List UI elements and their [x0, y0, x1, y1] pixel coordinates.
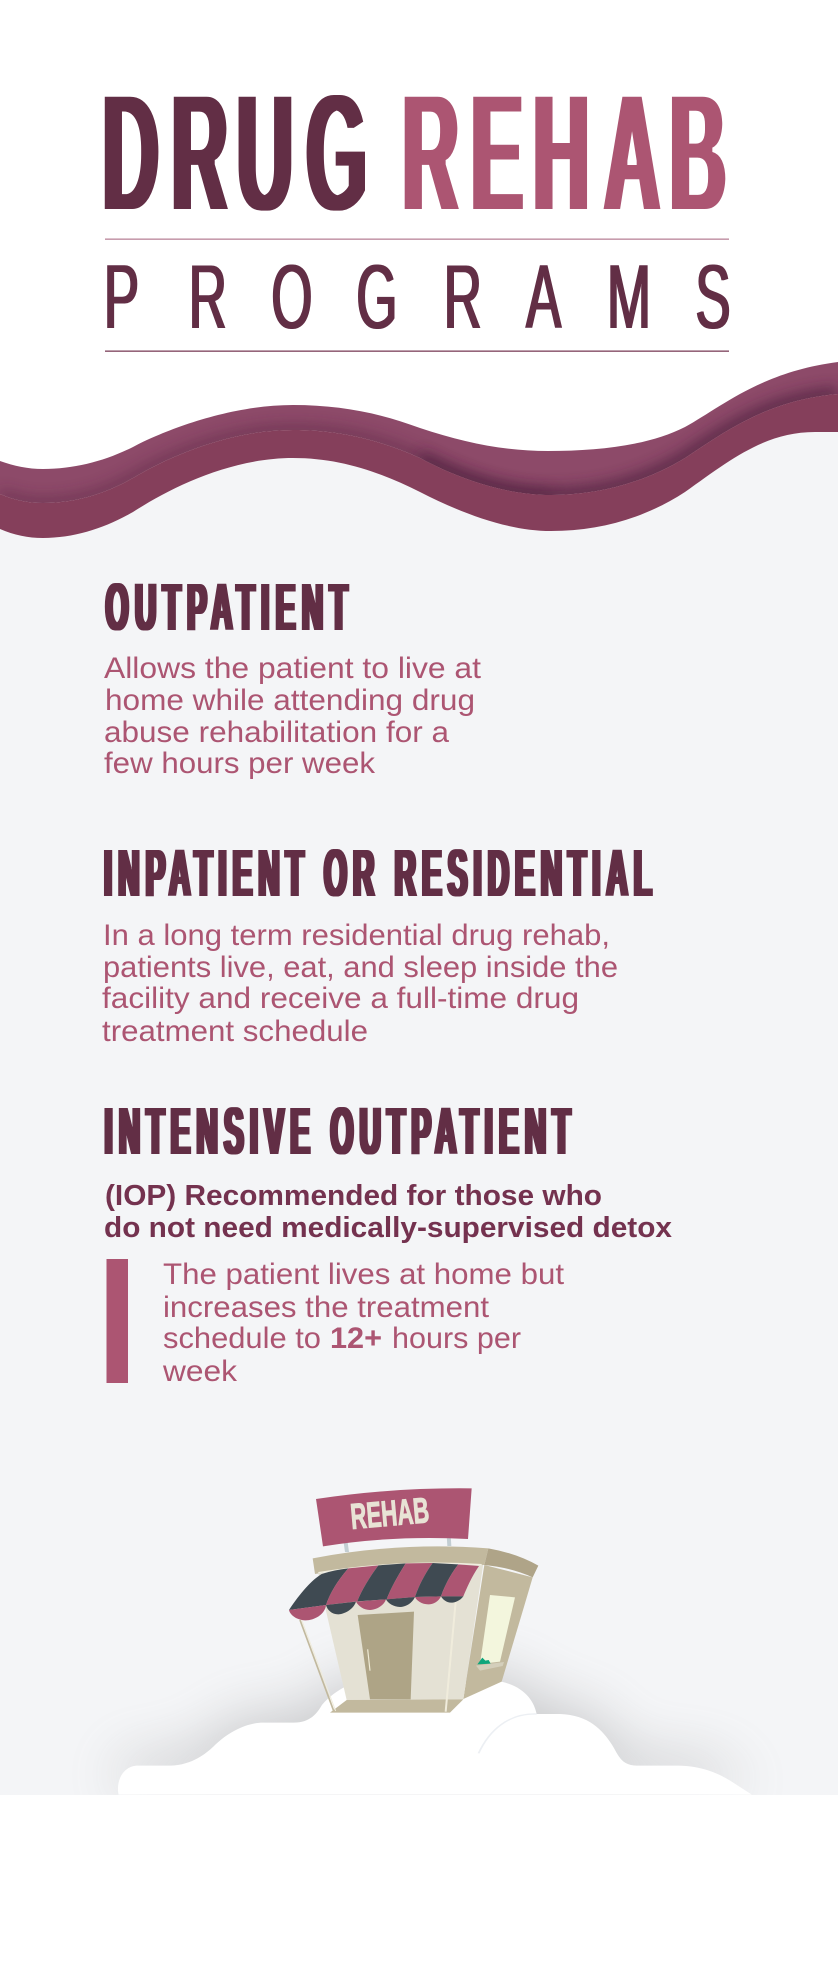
- sign posts: [343, 1535, 451, 1552]
- description: intensive outpatient: week: [162, 1355, 238, 1388]
- window box: [476, 1662, 504, 1671]
- bold intro: IOP: [104, 1180, 672, 1244]
- description: intensive outpatient: schedule to: [163, 1322, 321, 1355]
- plant: [477, 1658, 491, 1664]
- wave band: [0, 362, 838, 538]
- icon: rehab storefront: [289, 1488, 538, 1713]
- awning poles: [300, 1602, 456, 1712]
- description: inpatient: patients live, eat, and sleep inside the: [103, 951, 618, 984]
- awning: [289, 1563, 479, 1620]
- description: intensive outpatient: increases the treatment: [163, 1291, 490, 1324]
- title word: DRUG: DRUG: [103, 58, 367, 247]
- heading: inpatient or residential: INPATIENT OR RESIDENTIAL: [104, 835, 652, 910]
- roof front: [313, 1546, 488, 1574]
- title rule bottom: [105, 350, 729, 352]
- bold intro: IOP: do not need medically-supervised detox: [104, 1212, 672, 1244]
- cloud shadow: [118, 1674, 752, 1787]
- bottom white footer: [0, 1795, 838, 1981]
- description: intensive outpatient: hours per: [392, 1322, 521, 1355]
- heading: intensive outpatient: INTENSIVE OUTPATIENT: [104, 1093, 571, 1168]
- roof side: [484, 1548, 538, 1577]
- description: outpatient: few hours per week: [104, 747, 376, 780]
- description: outpatient: [104, 652, 482, 780]
- wave inner shading: [0, 394, 838, 503]
- sign label: REHAB: [349, 1489, 431, 1537]
- grey content background: [0, 432, 838, 1795]
- title: [103, 58, 726, 247]
- wave lower layer: [0, 394, 838, 538]
- description: intensive outpatient: [162, 1258, 565, 1388]
- cloud: [118, 1682, 752, 1795]
- side wall: [463, 1565, 533, 1699]
- subtitle: PROGRAMS: PROGRAMS: [104, 246, 731, 348]
- description: inpatient: In a long term residential drug rehab,: [103, 919, 610, 952]
- section: intensive outpatient: [104, 1093, 672, 1388]
- description: outpatient: home while attending drug: [105, 684, 475, 717]
- description: inpatient: [102, 919, 618, 1048]
- description: intensive outpatient: 12+: [330, 1322, 382, 1355]
- rehab sign: [316, 1488, 472, 1546]
- door handle: [368, 1649, 370, 1671]
- floor: [330, 1699, 463, 1713]
- wave upper layer: [0, 362, 838, 503]
- section: outpatient: [104, 569, 482, 780]
- section: inpatient or residential: [102, 835, 652, 1048]
- cream strip: [318, 1563, 482, 1573]
- door: [358, 1612, 414, 1699]
- front wall: [318, 1563, 483, 1700]
- description: inpatient: facility and receive a full-time drug: [102, 982, 579, 1015]
- bold intro: IOP: (IOP) Recommended for those who: [105, 1180, 602, 1212]
- description: inpatient: treatment schedule: [102, 1015, 368, 1048]
- description: outpatient: abuse rehabilitation for a: [104, 716, 449, 749]
- window: [480, 1595, 515, 1664]
- title word: REHAB: REHAB: [402, 58, 726, 247]
- accent bar: [106, 1259, 128, 1383]
- title rule top: [105, 238, 729, 240]
- description: outpatient: Allows the patient to live at: [104, 652, 482, 685]
- description: intensive outpatient: The patient lives at home but: [163, 1258, 565, 1291]
- heading: outpatient: OUTPATIENT: [106, 569, 348, 644]
